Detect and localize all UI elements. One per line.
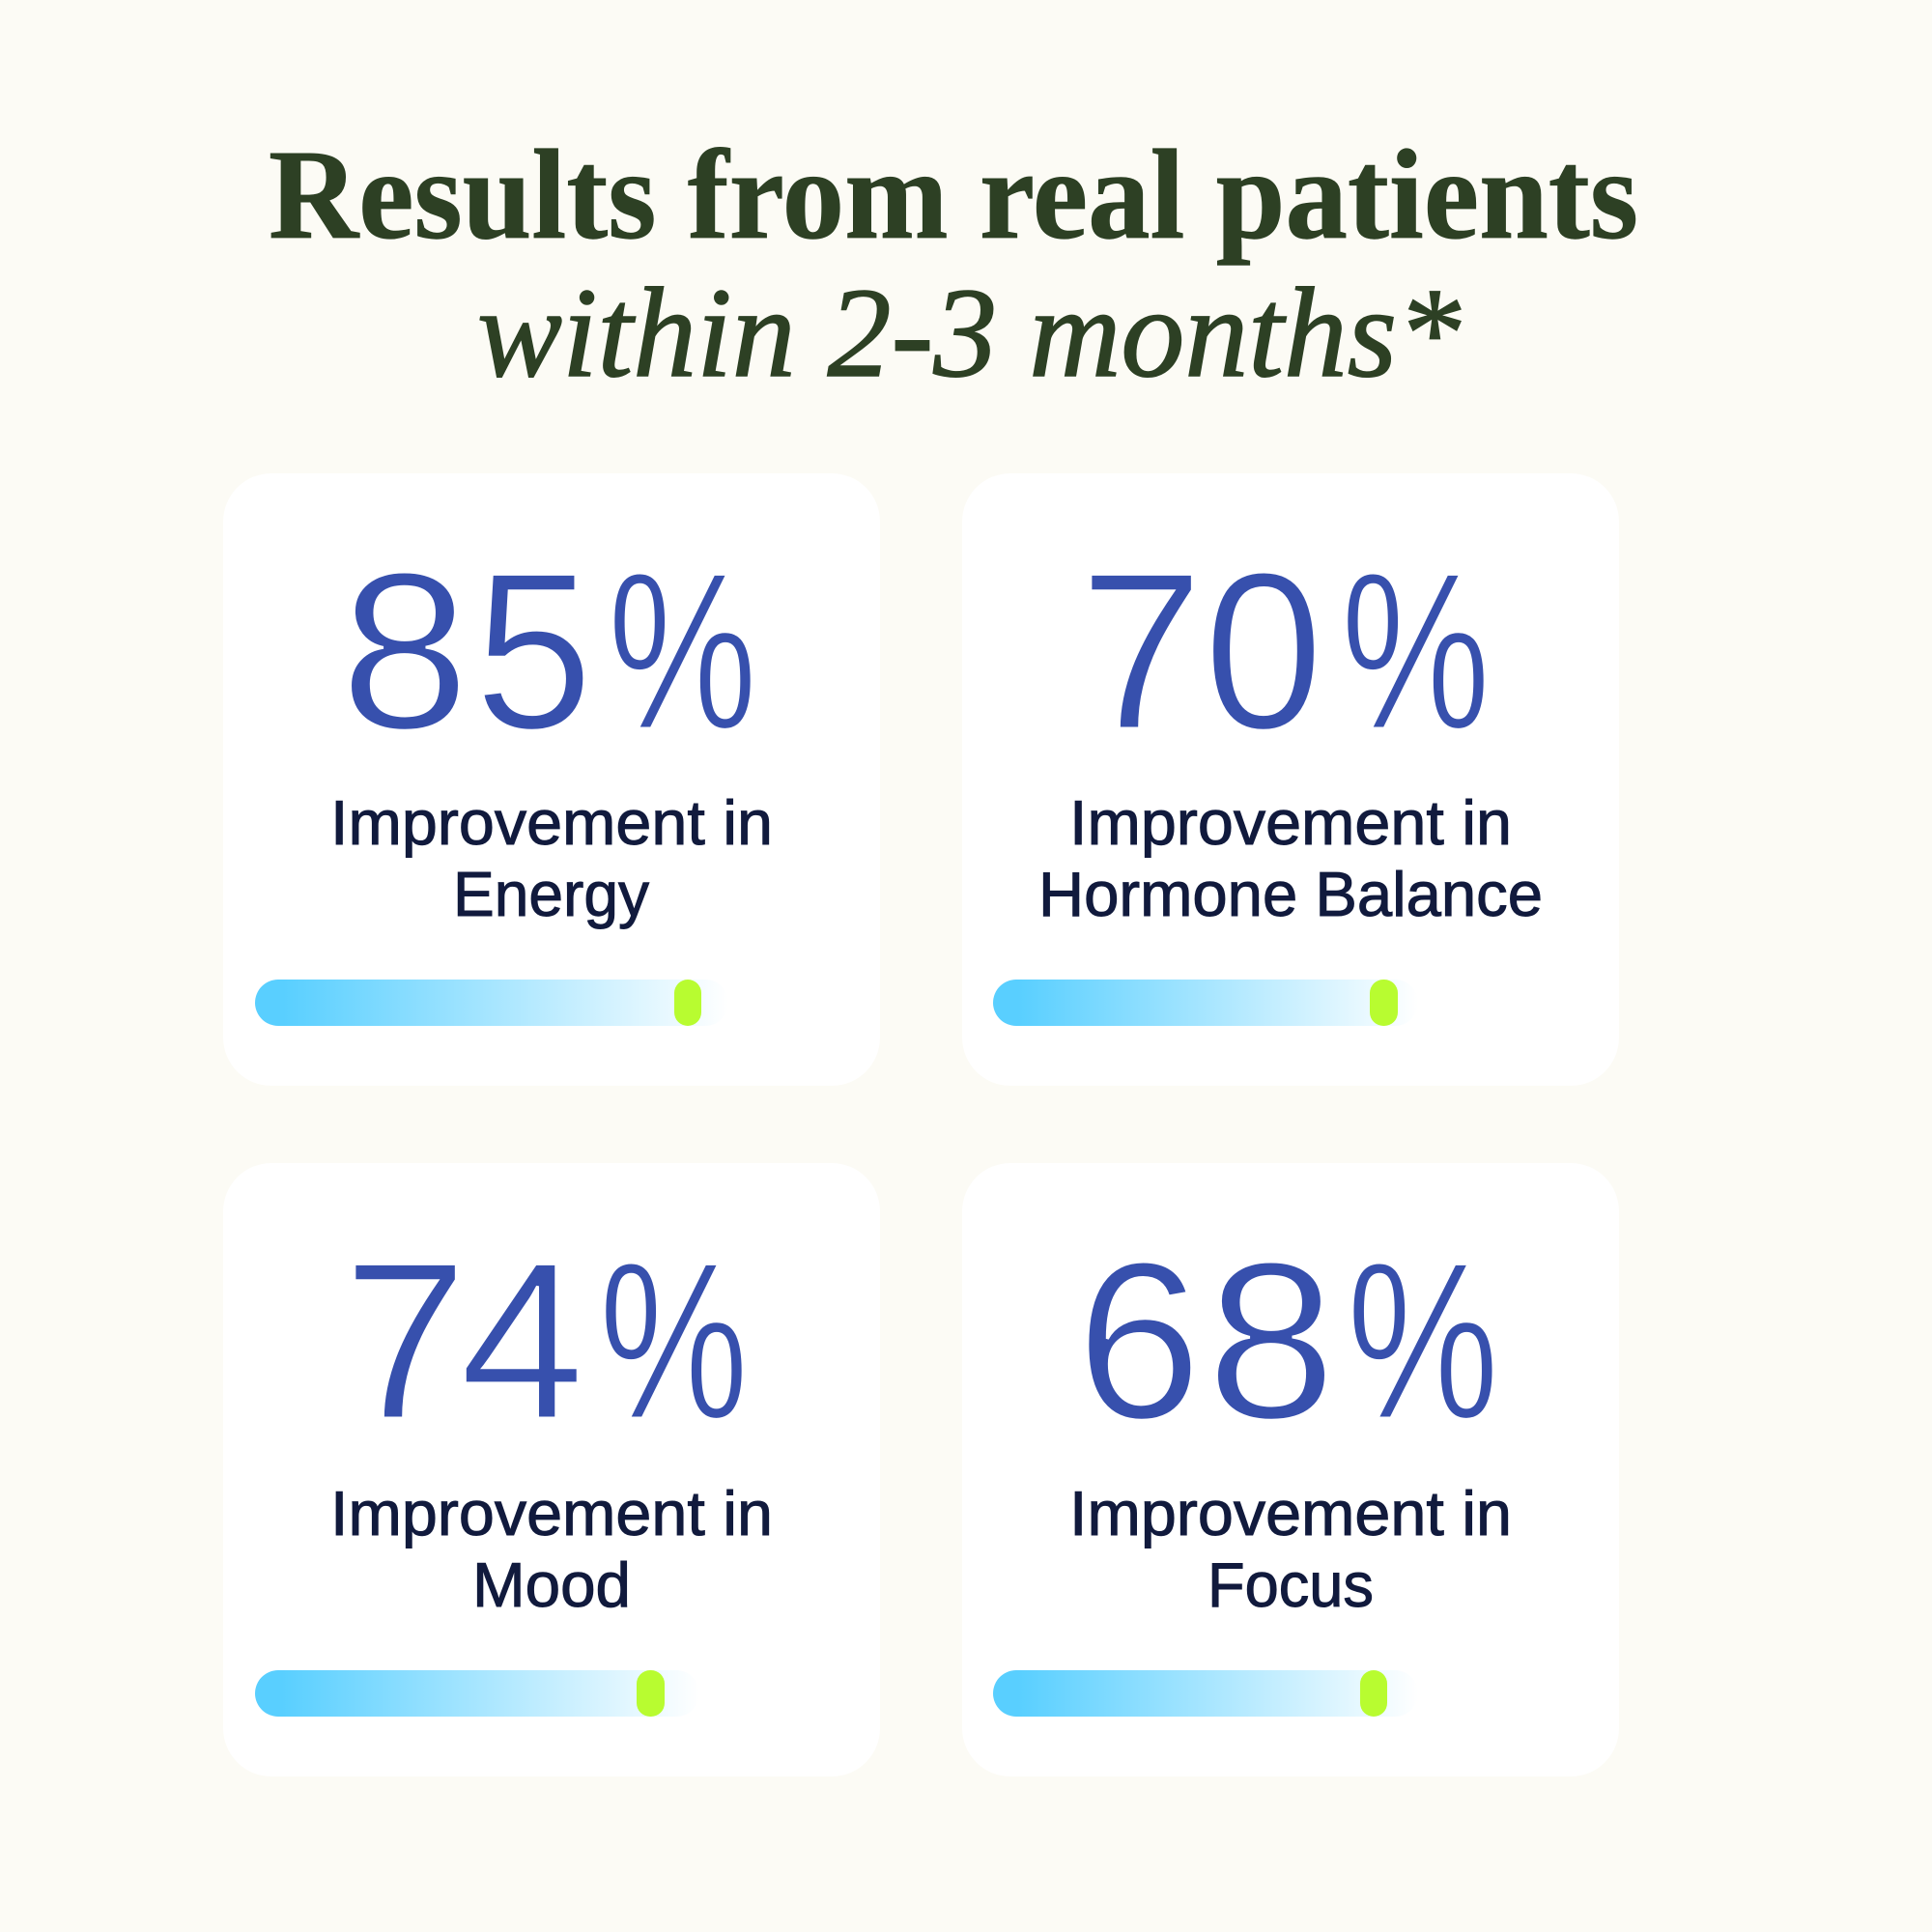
panel: hormone balance (962, 473, 1619, 1086)
stat: 68%: 8 (1207, 1216, 1336, 1466)
title: Results from real patients (269, 123, 1638, 266)
label: focus (1069, 1478, 1512, 1620)
label: energy (330, 787, 773, 929)
stat: 85%: % (608, 526, 757, 777)
progress bar: hormone balance (993, 980, 1418, 1026)
title: within 2-3 months* (477, 261, 1461, 404)
label: energy: Improvement in (330, 787, 773, 858)
progress bar: mood (255, 1670, 699, 1717)
label: focus: Focus (1208, 1549, 1374, 1620)
panel: focus (962, 1163, 1619, 1776)
stat: 70%: 0 (1204, 526, 1323, 777)
label: hormone balance (1038, 787, 1543, 929)
label: mood (330, 1478, 773, 1620)
stat: 70%: % (1341, 526, 1491, 777)
label: focus: Improvement in (1069, 1478, 1512, 1548)
label: hormone balance: Hormone Balance (1038, 859, 1543, 929)
label: hormone balance: Improvement in (1069, 787, 1512, 858)
label: energy: Energy (453, 859, 649, 929)
progress bar: focus (993, 1670, 1418, 1717)
stat: 74%: 4 (460, 1216, 584, 1466)
progress bar: energy (255, 980, 728, 1026)
stat: 68%: % (1347, 1216, 1499, 1466)
stat: 74% (343, 1216, 749, 1466)
label: mood: Improvement in (330, 1478, 773, 1548)
stat: 74%: % (599, 1216, 749, 1466)
stat: 85%: 5 (474, 526, 593, 777)
stat: 74%: 7 (343, 1216, 468, 1466)
stat: 85% (340, 526, 757, 777)
stat: 70% (1079, 526, 1491, 777)
stat: 85%: 8 (340, 526, 469, 777)
title (269, 123, 1638, 404)
panel: mood (223, 1163, 880, 1776)
stat: 68% (1076, 1216, 1499, 1466)
stat: 68%: 6 (1076, 1216, 1202, 1466)
stat: 70%: 7 (1079, 526, 1204, 777)
label: mood: Mood (472, 1549, 631, 1620)
panel: energy (223, 473, 880, 1086)
